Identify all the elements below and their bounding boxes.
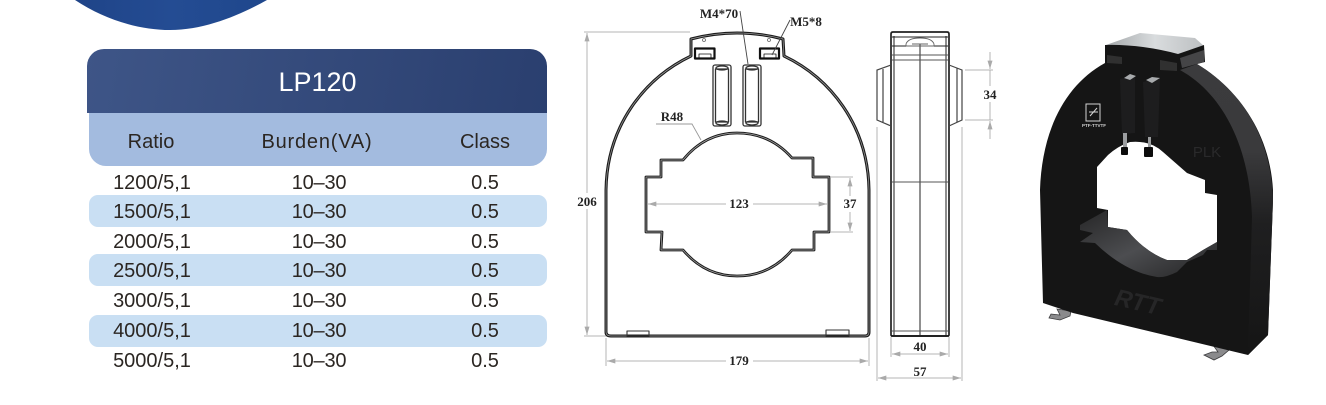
table row 3000/5,1 xyxy=(113,290,499,312)
table row 4000/5,1 xyxy=(89,315,547,347)
table row 3000/5,1: 0.5 xyxy=(471,290,499,312)
table row 5000/5,1: 10–30 xyxy=(292,350,346,372)
table title bar xyxy=(87,49,547,113)
label M4*70: M4*70 xyxy=(700,6,738,21)
dimension 179 xyxy=(606,338,869,366)
table row 2000/5,1 xyxy=(113,231,499,253)
table row 1500/5,1: 10–30 xyxy=(292,201,346,223)
table sub-header: Burden(VA) xyxy=(261,131,372,153)
table row 1200/5,1: 10–30 xyxy=(292,172,346,194)
table row 4000/5,1: 0.5 xyxy=(471,320,499,342)
label 123: 123 xyxy=(729,196,749,211)
table row 2500/5,1: 10–30 xyxy=(292,260,346,282)
logo mark xyxy=(1086,104,1100,121)
dimension 206 xyxy=(584,32,690,336)
table sub-header xyxy=(89,113,547,166)
label 206: 206 xyxy=(577,194,597,209)
table row 2000/5,1: 10–30 xyxy=(292,231,346,253)
label M5*8: M5*8 xyxy=(790,14,822,29)
secondary screws xyxy=(1120,74,1160,157)
table row 3000/5,1: 3000/5,1 xyxy=(113,290,191,312)
terminal pockets xyxy=(1107,55,1177,71)
glass top xyxy=(1106,33,1204,55)
label 57: 57 xyxy=(914,364,927,379)
table sub-header: Class xyxy=(460,131,510,153)
table row 1200/5,1 xyxy=(113,172,499,194)
table row 2500/5,1: 2500/5,1 xyxy=(113,260,191,282)
table row 2500/5,1: 0.5 xyxy=(471,260,499,282)
foot clips xyxy=(627,330,849,336)
leader lines xyxy=(656,11,790,140)
decorative blue blob xyxy=(75,0,267,30)
front outline xyxy=(606,33,869,336)
label R48: R48 xyxy=(661,109,684,124)
window cutout xyxy=(646,133,829,276)
table sub-header: Ratio xyxy=(128,131,174,153)
dimension 37 xyxy=(830,177,853,232)
table row 4000/5,1: 4000/5,1 xyxy=(113,320,191,342)
label 40: 40 xyxy=(914,339,926,354)
table row 2000/5,1: 2000/5,1 xyxy=(113,231,191,253)
label 34: 34 xyxy=(984,87,997,102)
mounting slots xyxy=(713,65,761,126)
table row 5000/5,1: 5000/5,1 xyxy=(113,350,191,372)
mounting feet xyxy=(1049,309,1229,360)
spec table xyxy=(87,49,547,166)
table row 2500/5,1 xyxy=(89,254,547,286)
dimension 123 xyxy=(648,203,827,205)
logo caption: PTF-TTVTF xyxy=(1082,123,1106,128)
side wings xyxy=(877,65,891,126)
table row 1500/5,1: 1500/5,1 xyxy=(113,201,191,223)
table row 5000/5,1: 0.5 xyxy=(471,350,499,372)
table row 1500/5,1 xyxy=(89,195,547,227)
embossed text upper right: PLK xyxy=(1193,144,1221,161)
table row 5000/5,1 xyxy=(113,350,499,372)
embossed brand lower: RTT xyxy=(1112,284,1166,322)
aperture inner wall xyxy=(1080,210,1217,277)
table row 2000/5,1: 0.5 xyxy=(471,231,499,253)
product photo: current transformer xyxy=(1040,33,1273,360)
terminal pockets xyxy=(695,38,779,58)
dimension 34 xyxy=(965,52,993,139)
table title bar: LP120 xyxy=(278,67,357,97)
dimension 57 xyxy=(877,127,962,381)
table row 1200/5,1: 0.5 xyxy=(471,172,499,194)
label 179: 179 xyxy=(729,353,749,368)
table row 1200/5,1: 1200/5,1 xyxy=(113,172,191,194)
table row 1500/5,1: 0.5 xyxy=(471,201,499,223)
side edge highlight xyxy=(1180,64,1273,355)
housing silhouette with aperture xyxy=(1040,45,1273,355)
dimension 40 xyxy=(891,337,949,357)
table row 4000/5,1: 10–30 xyxy=(292,320,346,342)
label 37: 37 xyxy=(844,196,857,211)
table row 3000/5,1: 10–30 xyxy=(292,290,346,312)
side view drawing xyxy=(877,32,962,336)
